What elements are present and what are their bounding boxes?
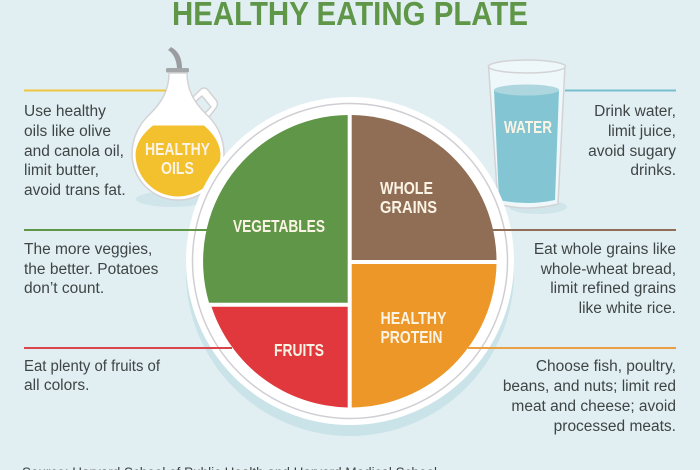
connector: protein	[468, 347, 676, 349]
text: water advice	[588, 103, 676, 179]
plate rim	[186, 97, 514, 425]
text: fruits advice: Eat plenty of fruits of	[24, 358, 161, 375]
text: protein advice: beans, and nuts; limit red	[503, 378, 676, 395]
text: grains advice: like white rice.	[579, 300, 676, 317]
label: healthy protein: HEALTHY	[380, 308, 447, 328]
text: vegetables advice	[24, 241, 159, 297]
text: protein advice: Choose fish, poultry,	[536, 358, 676, 375]
text: vegetables advice: don’t count.	[24, 280, 104, 297]
text: protein advice: processed meats.	[554, 418, 676, 435]
text: oils advice: and canola oil,	[24, 143, 124, 160]
segment: whole grains	[352, 115, 496, 260]
text: fruits advice	[24, 358, 161, 394]
text: grains advice: limit refined grains	[550, 280, 676, 297]
connector: oils	[24, 90, 166, 92]
segment: vegetables	[203, 115, 348, 303]
text: water advice: limit juice,	[608, 123, 676, 140]
label: vegetables: VEGETABLES	[233, 216, 325, 236]
icon: oil bottle	[132, 47, 224, 207]
segment: healthy protein	[352, 264, 496, 408]
label: fruits: FRUITS	[274, 340, 324, 360]
text: protein advice	[503, 358, 676, 435]
text: water advice: Drink water,	[594, 103, 676, 120]
text: grains advice: whole-wheat bread,	[540, 261, 676, 278]
text: oils advice: oils like olive	[24, 123, 111, 140]
label: healthy oils	[145, 139, 210, 178]
plate shadow	[186, 108, 514, 436]
text: oils advice: Use healthy	[24, 103, 106, 120]
text: oils advice: avoid trans fat.	[24, 182, 126, 199]
connector: water	[565, 90, 676, 92]
label: whole grains	[380, 178, 437, 217]
connector: vegetables	[24, 229, 208, 231]
label: whole grains: WHOLE	[380, 178, 433, 198]
text: vegetables advice: The more veggies,	[24, 241, 152, 258]
text: grains advice: Eat whole grains like	[534, 241, 676, 258]
label: water: WATER	[504, 117, 552, 137]
icon: water glass	[488, 60, 567, 214]
connector: grains	[492, 229, 676, 231]
segment: fruits	[212, 307, 348, 408]
label: healthy oils: OILS	[161, 158, 194, 178]
text: grains advice	[534, 241, 676, 317]
text: oils advice	[24, 103, 126, 199]
label: healthy protein	[380, 308, 447, 347]
label: whole grains: GRAINS	[380, 197, 437, 217]
label: healthy protein: PROTEIN	[380, 327, 442, 347]
connector: fruits	[24, 347, 232, 349]
text: water advice: avoid sugary	[588, 143, 676, 160]
text: water advice: drinks.	[630, 162, 676, 179]
plate	[186, 97, 514, 436]
text: oils advice: limit butter,	[24, 162, 99, 179]
text: vegetables advice: the better. Potatoes	[24, 261, 159, 278]
label: healthy oils: HEALTHY	[145, 139, 210, 159]
text: protein advice: meat and cheese; avoid	[511, 398, 676, 415]
text: fruits advice: all colors.	[24, 377, 89, 394]
